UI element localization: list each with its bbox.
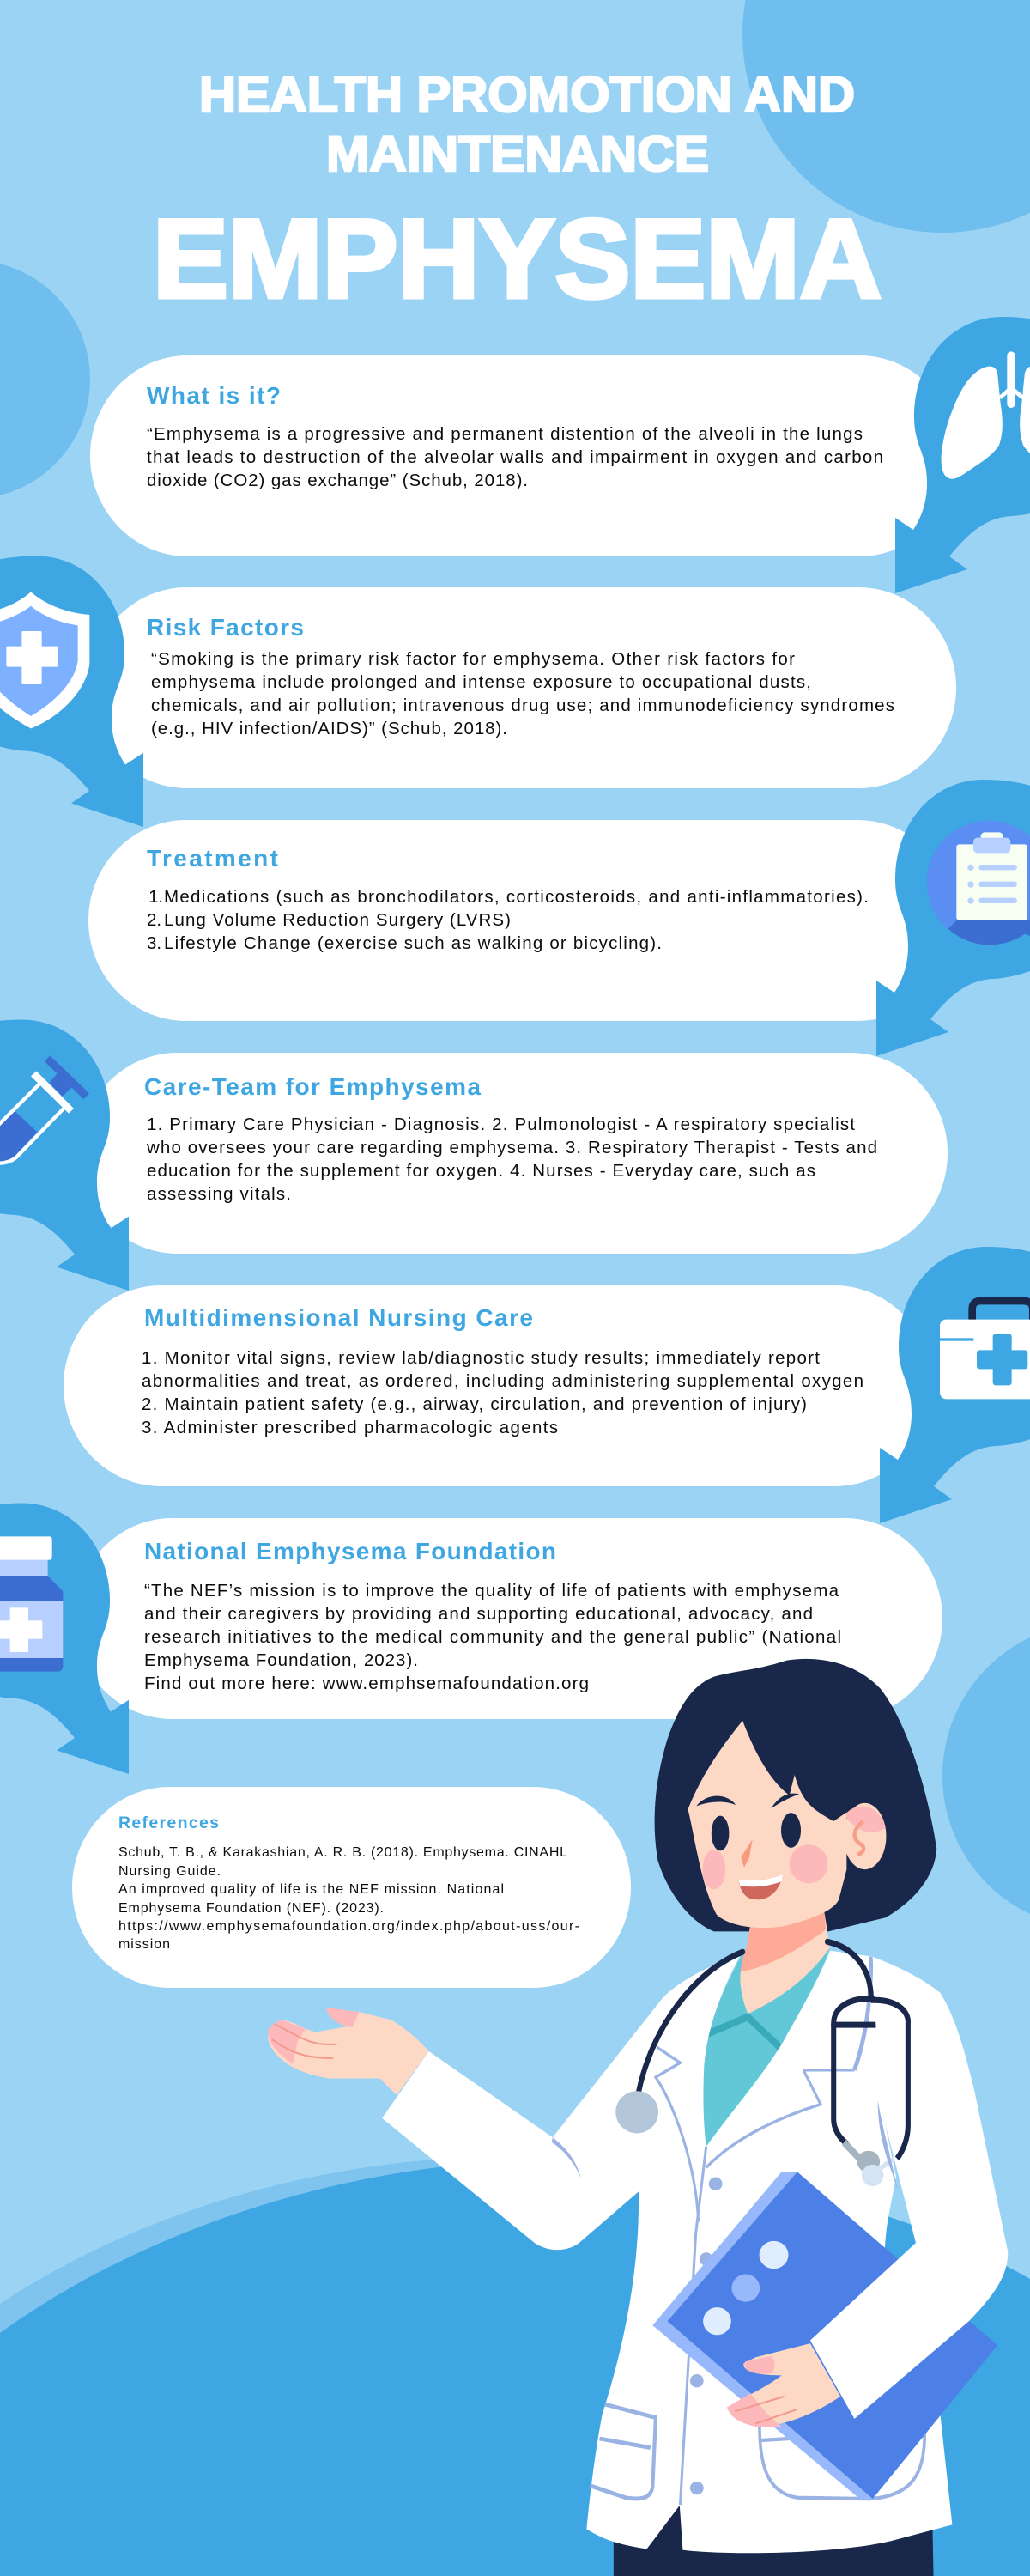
heading: National Emphysema Foundation xyxy=(144,1538,556,1564)
callout arrow: lungs xyxy=(895,317,1030,593)
body text: and their caregivers by providing and supporting educational, advocacy, and xyxy=(144,1604,813,1624)
body text: chemicals, and air pollution; intravenous drug use; and immunodeficiency syndromes xyxy=(151,696,894,715)
ear pink xyxy=(845,1807,886,1832)
body text: Lung Volume Reduction Surgery (LVRS) xyxy=(164,910,511,930)
body text: 1. Primary Care Physician - Diagnosis. 2. Pulmonologist - A respiratory specialist xyxy=(147,1115,855,1134)
callout arrow: shield xyxy=(0,556,143,827)
right hand creases xyxy=(735,2397,797,2423)
lab coat body xyxy=(553,1951,952,2553)
body text: “The NEF’s mission is to improve the quality of life of patients with emphysema xyxy=(144,1581,839,1601)
body text: 1. Monitor vital signs, review lab/diagnostic study results; immediately report xyxy=(142,1348,820,1368)
body text xyxy=(147,424,883,490)
body text: 3. Administer prescribed pharmacologic agents xyxy=(142,1418,558,1437)
body text: who oversees your care regarding emphysema. 3. Respiratory Therapist - Tests and xyxy=(146,1138,877,1157)
left pocket xyxy=(591,2404,656,2499)
body text: Lifestyle Change (exercise such as walking or bicycling). xyxy=(164,933,662,953)
body text: education for the supplement for oxygen. 4. Nurses - Everyday care, such as xyxy=(147,1161,815,1181)
left hand fingertips xyxy=(268,2008,359,2064)
coat buttons xyxy=(690,2178,723,2494)
icon: syringe xyxy=(0,1055,89,1163)
main title: EMPHYSEMA xyxy=(153,196,882,321)
body text: Medications (such as bronchodilators, corticosteroids, and anti-inflammatories). xyxy=(164,887,869,907)
body text: research initiatives to the medical community and the general public” (National xyxy=(144,1627,841,1647)
body text: https://www.emphysemafoundation.org/index.php/about-uss/our- xyxy=(118,1919,579,1934)
title line 2: MAINTENANCE xyxy=(326,126,709,182)
heading: Treatment xyxy=(147,845,278,872)
folder dots xyxy=(703,2241,788,2335)
panel shape: what is it xyxy=(90,355,957,556)
right hand xyxy=(727,2343,840,2427)
body text: Find out more here: www.emphsemafoundation.org xyxy=(144,1674,589,1693)
panel shape: treatment xyxy=(88,820,955,1021)
body text: Emphysema Foundation, 2023). xyxy=(144,1650,418,1670)
face xyxy=(688,1721,846,1928)
icon: first aid kit xyxy=(940,1301,1030,1399)
hair xyxy=(655,1659,936,1931)
neck xyxy=(740,1911,830,2014)
ear xyxy=(844,1803,886,1869)
panel shape: references xyxy=(72,1787,631,1988)
decorative circle: lower right xyxy=(942,1623,1030,1929)
body text: An improved quality of life is the NEF mission. National xyxy=(118,1882,504,1897)
body text: “Smoking is the primary risk factor for emphysema. Other risk factors for xyxy=(151,649,795,669)
bottom wave: blue ground xyxy=(0,2161,1030,2576)
body text: that leads to destruction of the alveolar walls and impairment in oxygen and carbon xyxy=(147,447,883,467)
body text: 2. Maintain patient safety (e.g., airway, circulation, and prevention of injury) xyxy=(142,1394,807,1414)
right sleeve xyxy=(810,1957,1008,2419)
body text: abnormalities and treat, as ordered, including administering supplemental oxygen xyxy=(142,1371,863,1391)
heading: Risk Factors xyxy=(147,614,304,641)
body text xyxy=(144,1581,841,1693)
teeth xyxy=(738,1874,783,1886)
coat seams xyxy=(656,1957,871,2505)
body text xyxy=(146,1115,877,1204)
sleeve fold xyxy=(878,2101,897,2189)
body text: “Emphysema is a progressive and permanent distention of the alveoli in the lungs xyxy=(147,424,863,444)
panel text: references xyxy=(118,1814,579,1952)
callout arrow: medicine bottle xyxy=(0,1503,129,1774)
panel text: care team xyxy=(144,1073,877,1204)
bottom wave: light band xyxy=(0,2155,549,2370)
neck shadow xyxy=(738,1911,826,1971)
cheeks xyxy=(702,1844,828,1889)
heading: What is it? xyxy=(147,382,281,409)
panel text: treatment xyxy=(147,845,869,953)
ear detail xyxy=(855,1821,863,1855)
icon: shield xyxy=(0,592,89,728)
panel text: risk factors xyxy=(147,614,894,738)
stethoscope ear tips xyxy=(844,2142,899,2186)
callout arrow: clipboard xyxy=(876,780,1030,1056)
panel text: nursing care xyxy=(142,1304,863,1437)
heading: Multidimensional Nursing Care xyxy=(144,1304,533,1331)
body text: Nursing Guide. xyxy=(118,1864,221,1879)
scrub top xyxy=(703,1947,830,2147)
panel shape: foundation xyxy=(75,1518,942,1719)
title xyxy=(153,67,882,321)
panel shape: nursing care xyxy=(64,1285,932,1486)
callout arrow: first aid kit xyxy=(880,1247,1030,1523)
decorative circle: top right xyxy=(742,0,1030,233)
mouth xyxy=(738,1874,783,1899)
body text: emphysema include prolonged and intense exposure to occupational dusts, xyxy=(151,672,811,692)
stethoscope over sleeve xyxy=(871,2000,908,2159)
body text xyxy=(142,1348,863,1437)
body text xyxy=(118,1845,579,1952)
body text xyxy=(151,649,894,738)
illustration: doctor xyxy=(268,1659,1008,2576)
stethoscope chest piece xyxy=(615,2091,658,2133)
body text: 1. xyxy=(148,887,163,907)
body text: dioxide (CO2) gas exchange” (Schub, 2018). xyxy=(147,471,528,490)
panel text: what is it xyxy=(147,382,883,490)
panel text: foundation xyxy=(144,1538,841,1693)
stethoscope xyxy=(639,1941,908,2159)
body text: assessing vitals. xyxy=(147,1184,291,1204)
trousers xyxy=(614,2499,934,2576)
heading: References xyxy=(118,1814,219,1832)
heading: Care-Team for Emphysema xyxy=(144,1073,481,1100)
decorative circle: left xyxy=(0,260,90,499)
body text: Emphysema Foundation (NEF). (2023). xyxy=(118,1901,384,1916)
icon: clipboard xyxy=(927,821,1030,945)
body text: Schub, T. B., & Karakashian, A. R. B. (2018). Emphysema. CINAHL xyxy=(118,1845,567,1860)
icon: lungs xyxy=(942,351,1030,479)
left sleeve xyxy=(382,1999,662,2250)
eyes xyxy=(696,1794,801,1850)
body text xyxy=(147,887,869,953)
panel shape: risk factors xyxy=(89,587,956,788)
body text: 3. xyxy=(147,933,161,953)
panel shape: care team xyxy=(80,1053,948,1254)
icon: medicine bottle xyxy=(0,1536,63,1672)
title line 1: HEALTH PROMOTION AND xyxy=(199,67,855,123)
nose xyxy=(741,1839,753,1868)
folder xyxy=(667,2172,997,2499)
body text: 2. xyxy=(147,910,161,930)
body text: mission xyxy=(118,1937,170,1952)
folder edge xyxy=(652,2172,873,2500)
scrub seam xyxy=(708,2017,783,2050)
right hand fingertips xyxy=(727,2356,782,2427)
left hand creases xyxy=(272,2024,336,2058)
coat sleeve folds xyxy=(552,2101,897,2189)
left hand xyxy=(268,2008,429,2095)
right pocket xyxy=(760,2415,924,2499)
callout arrow: syringe xyxy=(0,1019,129,1291)
body text: (e.g., HIV infection/AIDS)” (Schub, 2018). xyxy=(151,719,507,738)
